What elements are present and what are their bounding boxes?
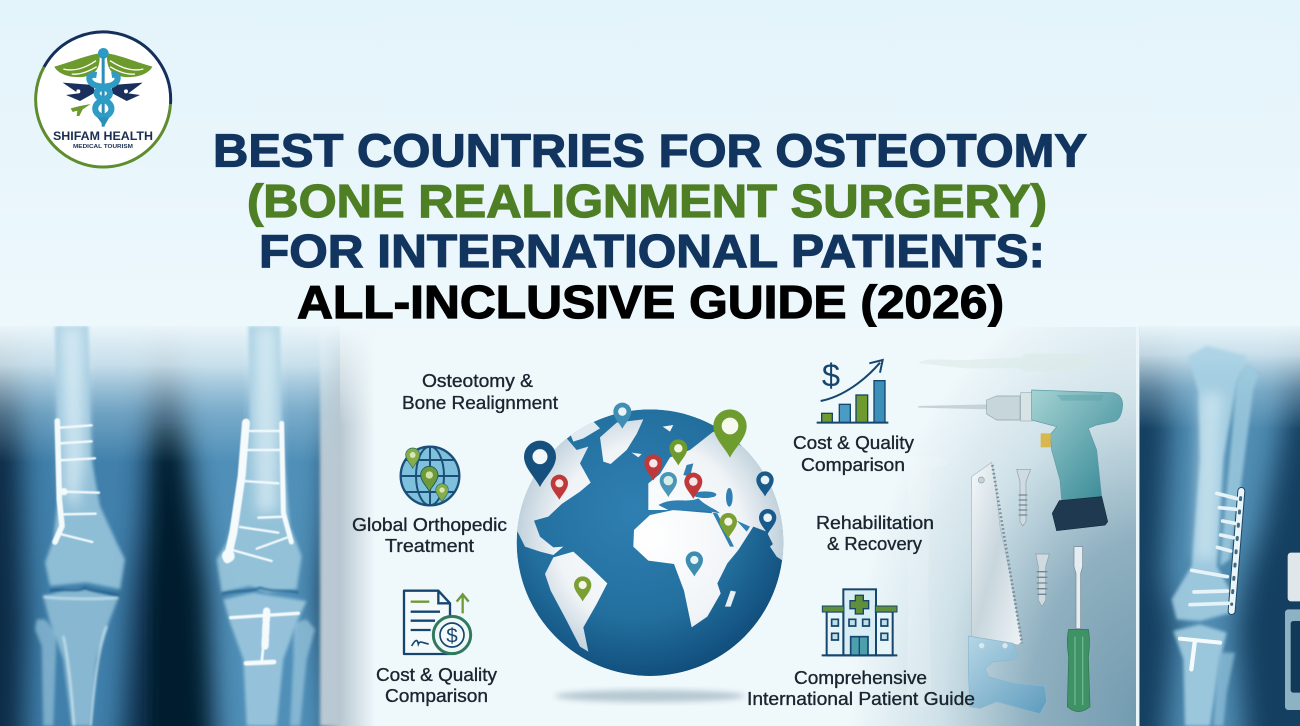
right knee bones xyxy=(217,326,315,726)
map pin: teal Greenland xyxy=(613,403,631,429)
surgical tools xyxy=(907,354,1123,714)
map pin: navy large xyxy=(524,441,556,487)
icon: rising cost chart: $ xyxy=(822,357,840,394)
left knee plate and screws xyxy=(55,421,99,542)
header band xyxy=(0,0,1300,327)
label: Osteotomy and Bone Realignment: Osteotomy & xyxy=(422,371,533,391)
logo emblem: caduceus, wings and plane xyxy=(54,48,152,127)
label: Osteotomy and Bone Realignment xyxy=(402,371,558,413)
title xyxy=(213,124,1087,328)
faint mallet xyxy=(907,457,948,707)
map pin: green Scandinavia xyxy=(669,439,687,465)
screw bottom xyxy=(1036,554,1049,607)
monitor box xyxy=(1285,609,1300,710)
logo: Shifam Health xyxy=(36,32,171,168)
icon: cost document with dollar coin xyxy=(404,591,471,654)
map pin: navy India xyxy=(759,509,776,534)
map pin: red America xyxy=(551,475,568,500)
label: Comprehensive International Patient Guide xyxy=(747,668,975,709)
leg bones xyxy=(1172,346,1258,726)
label: Cost and Quality Comparison (left): Comparison xyxy=(385,686,488,706)
title line 1: BEST COUNTRIES FOR OSTEOTOMY xyxy=(213,124,1087,176)
screw top xyxy=(1017,469,1031,526)
logo tagline: MEDICAL TOURISM xyxy=(73,144,133,150)
panel: centre background fade xyxy=(325,342,370,726)
label: Cost and Quality Comparison (right) xyxy=(793,433,914,475)
map pin: green large xyxy=(713,409,747,458)
plate and screws xyxy=(1180,491,1241,669)
label: Cost and Quality Comparison (left): Cost & Quality xyxy=(376,665,497,685)
faint probe xyxy=(918,354,1092,372)
bone saw xyxy=(968,462,1047,714)
panel: divider strip xyxy=(1136,327,1140,726)
label: Rehabilitation and Recovery xyxy=(816,513,934,554)
label: Cost and Quality Comparison (right): Cost & Quality xyxy=(793,433,914,453)
label: Osteotomy and Bone Realignment: Bone Realignment xyxy=(402,393,558,413)
label: Cost and Quality Comparison (left) xyxy=(376,665,497,706)
title line 2: (BONE REALIGNMENT SURGERY) xyxy=(247,175,1047,227)
logo name: SHIFAM HEALTH xyxy=(53,129,153,143)
map pin: red UK xyxy=(644,454,662,480)
drill xyxy=(918,390,1123,531)
icon: globe with pins xyxy=(401,447,459,505)
map pin: teal Africa xyxy=(686,551,703,576)
left knee bones xyxy=(35,326,125,726)
icon: rising cost chart xyxy=(817,357,888,423)
map pin: green South America xyxy=(574,576,591,601)
map pin: red Balkans xyxy=(684,473,702,499)
label: Global Orthopedic Treatment: Treatment xyxy=(385,536,474,556)
label: Rehabilitation and Recovery: Rehabilitation xyxy=(816,513,934,533)
label: Comprehensive International Patient Guide: International Patient Guide xyxy=(747,689,975,709)
globe sphere and continents xyxy=(513,409,787,676)
icon: cost document with dollar coin: $ xyxy=(446,624,458,647)
light equipment box xyxy=(1288,553,1300,601)
map pin: teal central Europe xyxy=(660,472,677,497)
panel: surgical tools background xyxy=(850,327,1137,726)
label: Global Orthopedic Treatment: Global Orthopedic xyxy=(352,515,507,535)
icon: hospital xyxy=(822,589,897,655)
logo badge ring xyxy=(36,32,171,168)
panel: lower leg x-ray xyxy=(1139,326,1300,726)
label: Rehabilitation and Recovery: & Recovery xyxy=(827,534,922,554)
title line 4: ALL-INCLUSIVE GUIDE (2026) xyxy=(297,276,1004,328)
screwdriver xyxy=(1067,547,1090,712)
map pin: navy Asia xyxy=(756,471,774,496)
label: Comprehensive International Patient Guide: Comprehensive xyxy=(794,668,927,688)
label: Cost and Quality Comparison (right): Comparison xyxy=(801,455,905,475)
title line 3: FOR INTERNATIONAL PATIENTS: xyxy=(259,225,1045,277)
right knee plates and screws xyxy=(222,423,298,663)
label: Global Orthopedic Treatment xyxy=(352,515,507,556)
panel: knee x-rays xyxy=(0,326,340,726)
map pin: green Middle East xyxy=(720,513,737,538)
globe shadow xyxy=(555,690,745,702)
globe with map pins xyxy=(513,403,787,676)
